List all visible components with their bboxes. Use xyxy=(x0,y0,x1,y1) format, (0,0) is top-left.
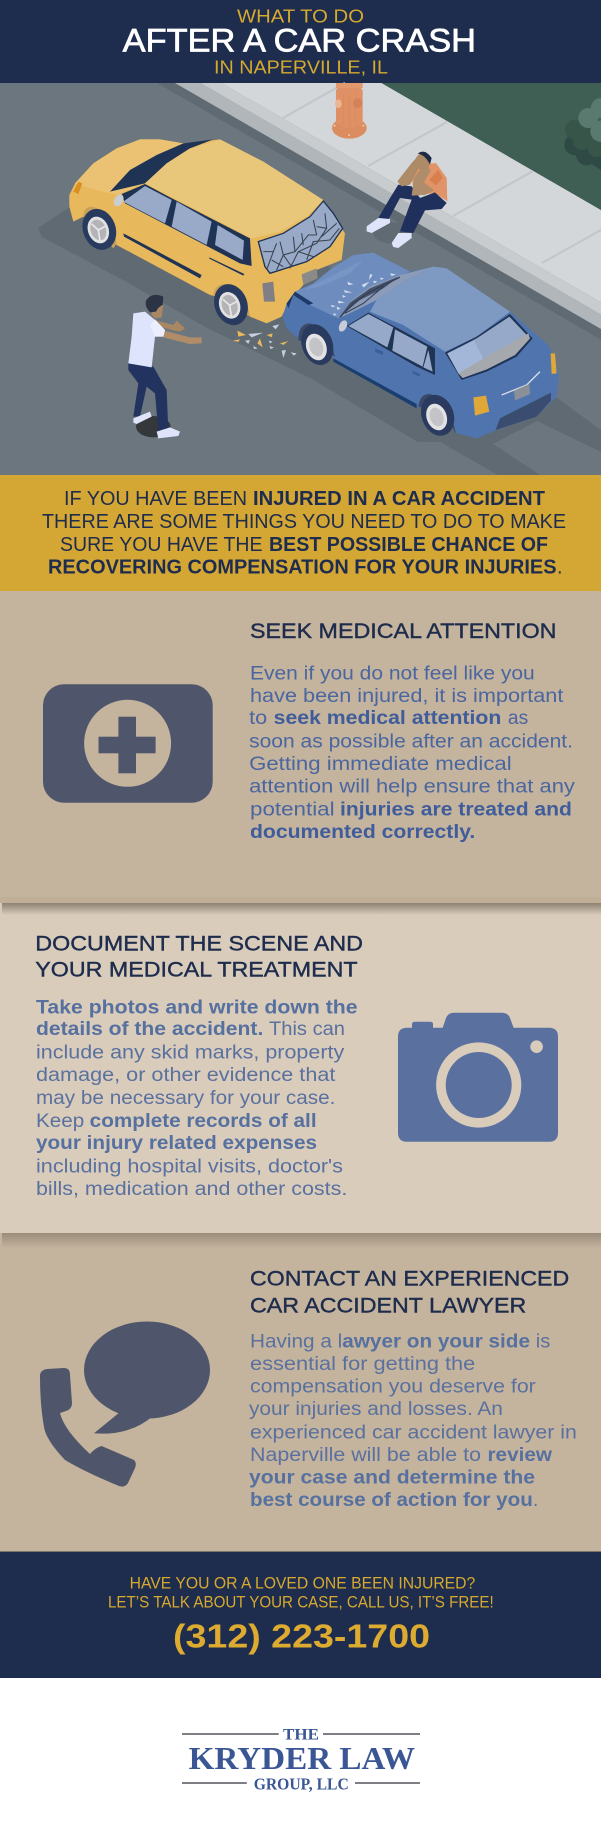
body text: to xyxy=(249,708,267,729)
body text xyxy=(36,997,358,1200)
intro text xyxy=(42,488,566,578)
body text: your case and determine the xyxy=(249,1467,535,1488)
logo: The Kryder Law Group: THE xyxy=(283,1726,319,1743)
heading xyxy=(250,1267,569,1318)
panel: contact a lawyer xyxy=(0,1233,601,1552)
body text: your injuries and losses. An xyxy=(249,1399,503,1420)
body text: attention will help ensure that any xyxy=(249,777,575,798)
body text: best course of action for you xyxy=(250,1490,533,1511)
body text: . xyxy=(533,1490,538,1511)
icon: speech bubble xyxy=(84,1322,210,1434)
main title: AFTER A CAR CRASH xyxy=(123,23,476,59)
body text: essential for getting the xyxy=(250,1354,475,1375)
intro text: . xyxy=(557,556,563,578)
intro text: BEST POSSIBLE CHANCE OF xyxy=(269,534,548,556)
body text: compensation you deserve for xyxy=(250,1376,537,1397)
call to action band xyxy=(0,1552,601,1678)
body text: damage, or other evidence that xyxy=(36,1065,336,1086)
header banner xyxy=(0,0,601,83)
body text: Having a l xyxy=(250,1331,342,1352)
intro text: SURE YOU HAVE THE xyxy=(60,534,262,556)
heading: DOCUMENT THE SCENE AND xyxy=(35,932,363,956)
body text: Even if you do not feel like you xyxy=(250,663,535,684)
body text: seek medical attention xyxy=(274,708,501,729)
heading: CONTACT AN EXPERIENCED xyxy=(250,1267,569,1291)
body text: your injury related expenses xyxy=(36,1133,317,1154)
call to action text: LET’S TALK ABOUT YOUR CASE, CALL US, IT’S FREE! xyxy=(108,1593,494,1611)
heading: SEEK MEDICAL ATTENTION xyxy=(250,619,556,643)
body text xyxy=(249,663,575,843)
logo: The Kryder Law Group: GROUP, LLC xyxy=(254,1774,349,1793)
crash scene illustration xyxy=(0,83,601,475)
body text: awyer on your side xyxy=(342,1331,530,1352)
blue car xyxy=(283,253,559,441)
intro text: RECOVERING COMPENSATION FOR YOUR INJURIES xyxy=(48,556,556,578)
body text: bills, medication and other costs. xyxy=(36,1179,347,1200)
body text: review xyxy=(488,1445,552,1466)
person sitting on curb xyxy=(367,152,447,248)
body text: documented correctly. xyxy=(250,822,475,843)
body text: may be necessary for your case. xyxy=(36,1088,335,1109)
yellow car xyxy=(69,139,345,330)
body text: details of the accident. xyxy=(36,1019,263,1040)
body text: Take photos and write down the xyxy=(36,997,358,1018)
heading xyxy=(35,932,363,982)
phone number: (312) 223-1700 xyxy=(173,1617,430,1654)
body text xyxy=(249,1331,577,1511)
body text: complete records of all xyxy=(90,1111,317,1132)
body text: soon as possible after an accident. xyxy=(249,731,573,752)
body text: Getting immediate medical xyxy=(249,754,512,775)
body text: have been injured, it is important xyxy=(250,686,564,707)
header location: IN NAPERVILLE, IL xyxy=(214,56,388,77)
debris on road xyxy=(233,324,297,358)
body text: experienced car accident lawyer in xyxy=(250,1422,577,1443)
icon: telephone handset xyxy=(40,1368,136,1487)
panel: document the scene xyxy=(35,932,558,1200)
icon: fire hydrant xyxy=(332,83,367,139)
body text: including hospital visits, doctor's xyxy=(36,1156,343,1177)
intro text: INJURED IN A CAR ACCIDENT xyxy=(253,488,545,510)
logo: The Kryder Law Group: KRYDER LAW xyxy=(189,1740,415,1776)
body text: include any skid marks, property xyxy=(36,1042,345,1063)
heading: YOUR MEDICAL TREATMENT xyxy=(35,958,358,982)
panel: section 2 background xyxy=(0,903,601,1233)
header kicker: WHAT TO DO xyxy=(237,6,364,27)
body text: This can xyxy=(269,1019,345,1040)
intro text: THERE ARE SOME THINGS YOU NEED TO DO TO MAKE xyxy=(42,511,566,533)
call to action text xyxy=(108,1574,494,1611)
intro text: IF YOU HAVE BEEN xyxy=(64,488,247,510)
logo: The Kryder Law Group xyxy=(182,1726,420,1793)
intro band xyxy=(0,475,601,591)
body text: is xyxy=(536,1331,550,1352)
call to action text: HAVE YOU OR A LOVED ONE BEEN INJURED? xyxy=(130,1574,475,1592)
panel: seek medical attention xyxy=(0,591,601,903)
road shadows xyxy=(38,207,601,475)
heading: CAR ACCIDENT LAWYER xyxy=(250,1294,526,1318)
body text: potential xyxy=(250,800,335,821)
icon: camera xyxy=(398,1013,558,1142)
person standing gesturing xyxy=(128,295,202,438)
body text: injuries are treated and xyxy=(340,800,572,821)
icon: medical kit xyxy=(43,684,213,803)
body text: Naperville will be able to xyxy=(250,1445,481,1466)
body text: as xyxy=(508,708,528,729)
icon: bush xyxy=(564,98,601,170)
body text: Keep xyxy=(36,1111,84,1132)
